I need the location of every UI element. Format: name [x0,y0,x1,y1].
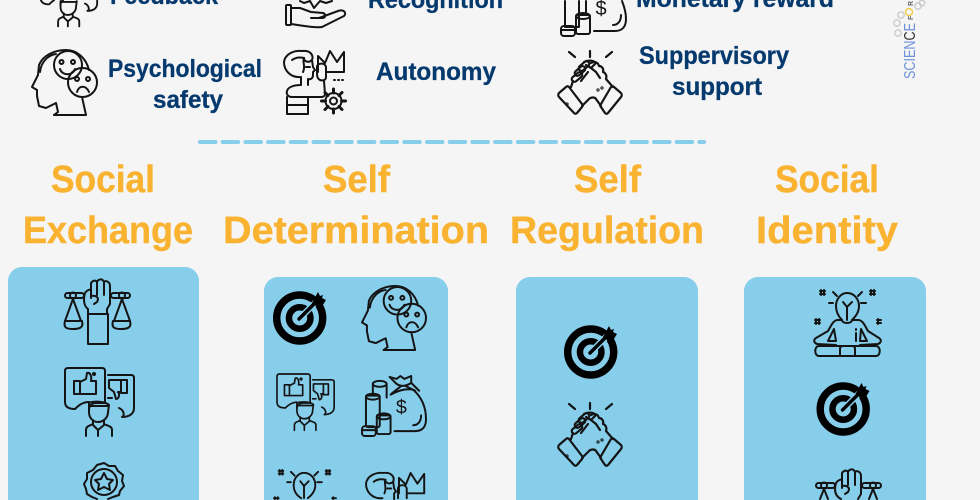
icon: feedback [41,0,97,26]
label: supervisory support: Suppervisory [639,42,789,70]
logo: science for: SCIENCE [902,23,919,79]
label: autonomy: Autonomy [376,58,496,86]
heading: self determination [223,159,489,252]
label: psychological safety: Psychological [108,55,262,83]
icon: meditating mind [814,290,881,356]
icon: recognition medal [84,463,124,499]
label: supervisory support: support [672,73,763,101]
label: psychological safety [108,55,262,114]
icon: feedback [65,368,134,436]
panel: self determination [264,277,448,500]
heading: social exchange [23,159,193,252]
label: supervisory support [639,42,789,101]
heading: self determination: Determination [223,210,489,252]
panel: social exchange [8,267,199,500]
icon: goal target [820,383,870,432]
heading: self regulation [510,159,704,252]
heading: social identity: Social [775,159,879,201]
heading: social identity: Identity [756,210,898,252]
panel: social identity [744,277,926,500]
icon: recognition hand [286,1,345,27]
dashed divider [200,140,704,144]
icon: meditating mind [274,470,336,499]
heading: social exchange: Exchange [23,210,193,252]
icon: psychological safety head [362,286,426,350]
icon: goal target [568,326,617,375]
logo: science for: F [908,15,915,20]
icon: autonomy [284,51,346,114]
icon: money bag [561,0,626,36]
logo: science for: R [908,1,915,6]
heading: social exchange: Social [51,159,155,201]
icon: money bag [362,376,426,436]
icon: justice scale [816,469,881,499]
heading: self regulation: Self [574,159,641,201]
icon: goal target [277,292,326,341]
label: psychological safety: safety [153,86,223,114]
icon: clasped hands [558,403,622,466]
icon: autonomy [366,473,424,499]
icon: feedback [277,374,334,430]
icon: psychological safety head [32,50,97,115]
icon: justice scale [64,279,130,344]
icon: clasped hands [558,51,622,114]
panel: self regulation [516,277,698,500]
logo: science for [894,0,925,79]
heading: social identity [756,159,898,252]
heading: self regulation: Regulation [510,210,704,252]
heading: self determination: Self [323,159,390,201]
